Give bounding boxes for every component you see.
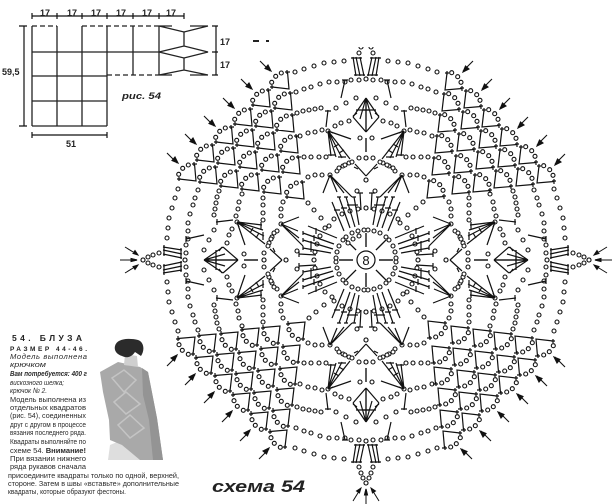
- article text block: [8, 333, 179, 496]
- instructions: схеме 54. Внимание!: [10, 446, 86, 455]
- dimension labels: 17: [40, 8, 50, 18]
- dimension labels: 17: [220, 60, 230, 70]
- figure 54: assembly diagram: [2, 8, 230, 149]
- instructions: (рис. 54), соединенных: [10, 411, 86, 420]
- blouse: [100, 362, 163, 460]
- neck: [124, 354, 138, 367]
- dimension labels: 17: [142, 8, 152, 18]
- chart quadrant: lower right: [363, 257, 612, 504]
- materials: крючок № 2.: [10, 386, 47, 395]
- lace texture: [112, 370, 144, 438]
- figure caption: рис. 54: [121, 91, 161, 101]
- dimension labels: 59,5: [2, 67, 20, 77]
- dimension labels: 17: [116, 8, 126, 18]
- instructions: отдельных квадратов: [10, 403, 86, 412]
- hair: [115, 339, 143, 357]
- instructions: При вязании нижнего: [10, 454, 86, 463]
- arm: [142, 368, 163, 460]
- skirt: [108, 440, 142, 460]
- size line: РАЗМЕР 44-46.: [10, 346, 87, 353]
- festoon shapes: [159, 26, 208, 75]
- dashed edges: [32, 26, 159, 75]
- stray print mark: [253, 40, 269, 42]
- center ring with number 8: [357, 251, 375, 269]
- instructions: квадраты, которые образуют фестоны.: [8, 487, 126, 496]
- chart quadrant: lower left: [120, 257, 369, 504]
- materials: крючком: [10, 360, 47, 369]
- dimension labels: 17: [91, 8, 101, 18]
- instructions: стороне. Затем в швы «вставьте» дополнительные: [8, 479, 179, 488]
- materials: вискозного шелка;: [10, 378, 64, 387]
- instructions: присоедините квадраты только по одной, верхней,: [8, 471, 179, 480]
- dimension labels: 17: [67, 8, 77, 18]
- materials: Модель выполнена: [10, 352, 87, 361]
- heading: 54. БЛУЗА: [12, 333, 82, 343]
- dimension labels: 17: [166, 8, 176, 18]
- crochet chart: scheme 54: [120, 14, 612, 504]
- center ring with number 8: 8: [362, 253, 370, 268]
- dimension lines: [19, 13, 218, 138]
- instructions: Квадраты выполняйте по: [10, 437, 86, 446]
- instructions: ряда рукавов сначала: [10, 462, 87, 471]
- chart quadrant: upper left: [120, 14, 369, 263]
- white patch cutting off the top tip of the chart: [290, 0, 440, 47]
- instructions: друг с другом в процессе: [10, 420, 86, 429]
- dimension labels: 17: [220, 37, 230, 47]
- grid of squares: [32, 26, 159, 126]
- instructions: [8, 395, 179, 496]
- chart quadrant: upper right: [363, 14, 612, 263]
- dimension labels: 51: [66, 139, 76, 149]
- photo: woman in crochet blouse: [100, 339, 163, 460]
- instructions: вязания последнего ряда.: [10, 428, 86, 437]
- chart title: схема 54: [212, 477, 306, 496]
- extra chain in upper left of the centre: [348, 236, 359, 243]
- materials: Вам потребуется: 400 г: [10, 369, 87, 378]
- dimension labels: [2, 8, 230, 149]
- instructions: Модель выполнена из: [10, 395, 87, 404]
- materials: [10, 352, 87, 395]
